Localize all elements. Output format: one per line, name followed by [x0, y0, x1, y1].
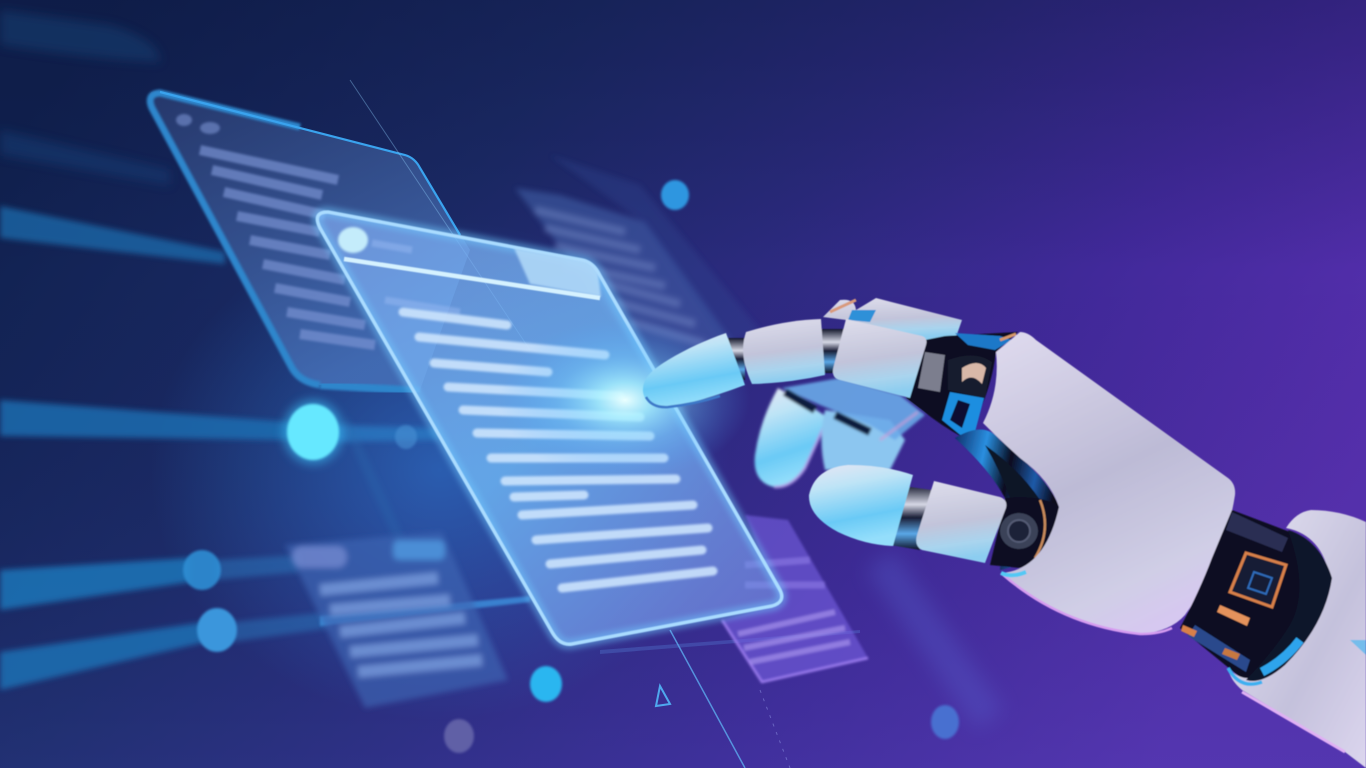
header rule [344, 259, 600, 298]
back fingers [755, 378, 925, 487]
panel outline [317, 212, 782, 644]
chrome knuckles [906, 332, 1018, 438]
thin lines and triangle marker [350, 80, 790, 768]
wrist [1180, 510, 1332, 682]
blurred back panel: bottom left [285, 532, 508, 708]
chrome thumb base [955, 429, 1059, 570]
panel outline glow [317, 212, 782, 644]
panel header tab [514, 248, 601, 297]
wrist orange bars [1217, 605, 1250, 626]
palm [983, 332, 1235, 634]
thumb ring joint [990, 497, 1059, 568]
index finger tip [643, 333, 745, 407]
index finger base [833, 319, 926, 398]
index joints [728, 338, 745, 380]
small blurred dots and glowing nodes [183, 400, 959, 753]
thumb segment [916, 481, 1006, 563]
document text lines [403, 312, 713, 588]
forearm [1228, 510, 1366, 768]
document panel: back, top left [150, 91, 470, 391]
upper back finger [823, 298, 962, 340]
blurred back panel: bottom right purple [722, 515, 868, 682]
blurred back panel: top centre [515, 155, 760, 380]
robot hand [643, 298, 1366, 768]
fingertip glow [500, 320, 750, 480]
icon: blue dot top centre [661, 180, 689, 210]
forearm ring opening [1246, 530, 1332, 681]
thumb joint [890, 485, 932, 550]
document panel: main [317, 212, 782, 644]
light streaks on the left [0, 10, 990, 720]
thumb tip [809, 465, 913, 546]
index finger middle [743, 319, 825, 384]
wrist orange module [1230, 553, 1286, 607]
header placeholder [372, 243, 460, 312]
panel avatar dot [338, 227, 368, 253]
